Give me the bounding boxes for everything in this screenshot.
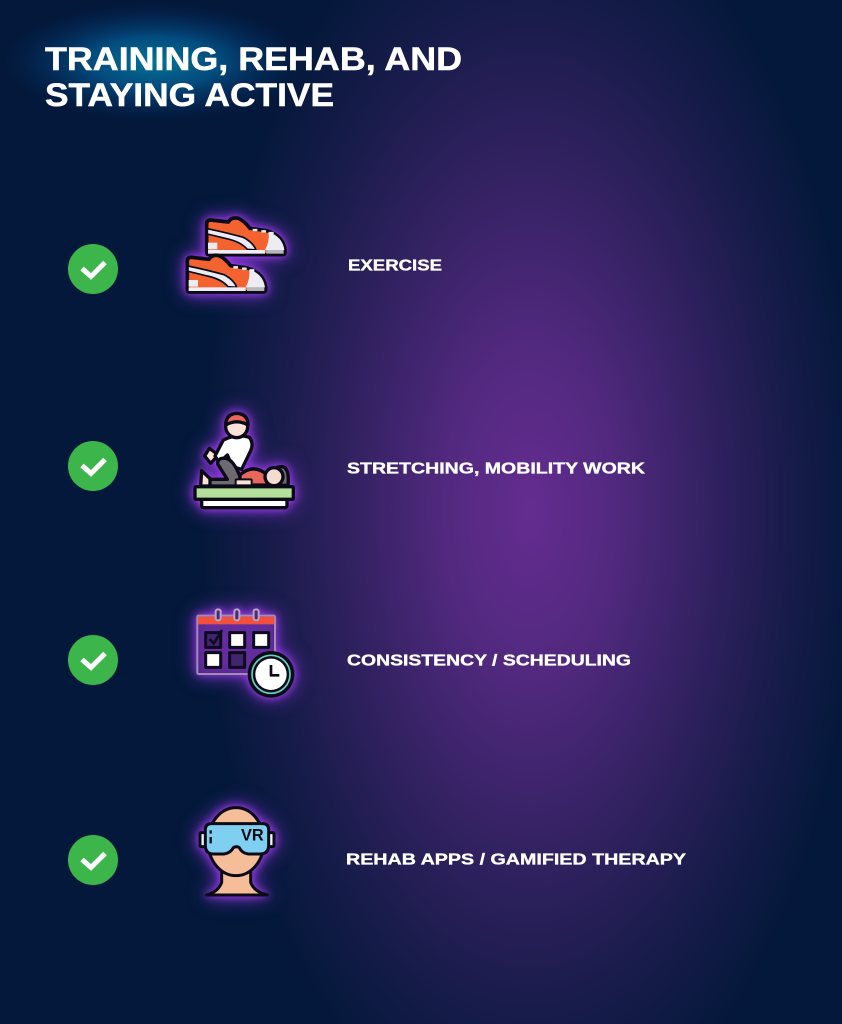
- icon: check mark: [68, 441, 118, 491]
- row: consistency: [68, 609, 631, 698]
- label: consistency: CONSISTENCY / SCHEDULING: [347, 652, 631, 670]
- icon: VR headset user: [200, 808, 274, 895]
- icon: check mark: [68, 244, 118, 294]
- label: exercise: EXERCISE: [348, 258, 442, 274]
- icon: check mark: [68, 835, 118, 885]
- title: TRAINING, REHAB, AND: [45, 41, 462, 77]
- row: exercise: [68, 218, 442, 294]
- icon: VR headset user: VR: [241, 826, 264, 844]
- icon: calendar and clock: [197, 609, 294, 698]
- title: STAYING ACTIVE: [45, 77, 334, 113]
- label: rehab apps: REHAB APPS / GAMIFIED THERAPY: [346, 852, 687, 868]
- icon: therapist stretching patient: [195, 413, 293, 508]
- icon: check mark: [68, 635, 118, 685]
- title: [45, 41, 462, 113]
- row: stretching: [68, 413, 646, 508]
- row: rehab apps: [68, 808, 687, 895]
- label: stretching: STRETCHING, MOBILITY WORK: [347, 460, 646, 478]
- icon: running shoes: [187, 218, 285, 292]
